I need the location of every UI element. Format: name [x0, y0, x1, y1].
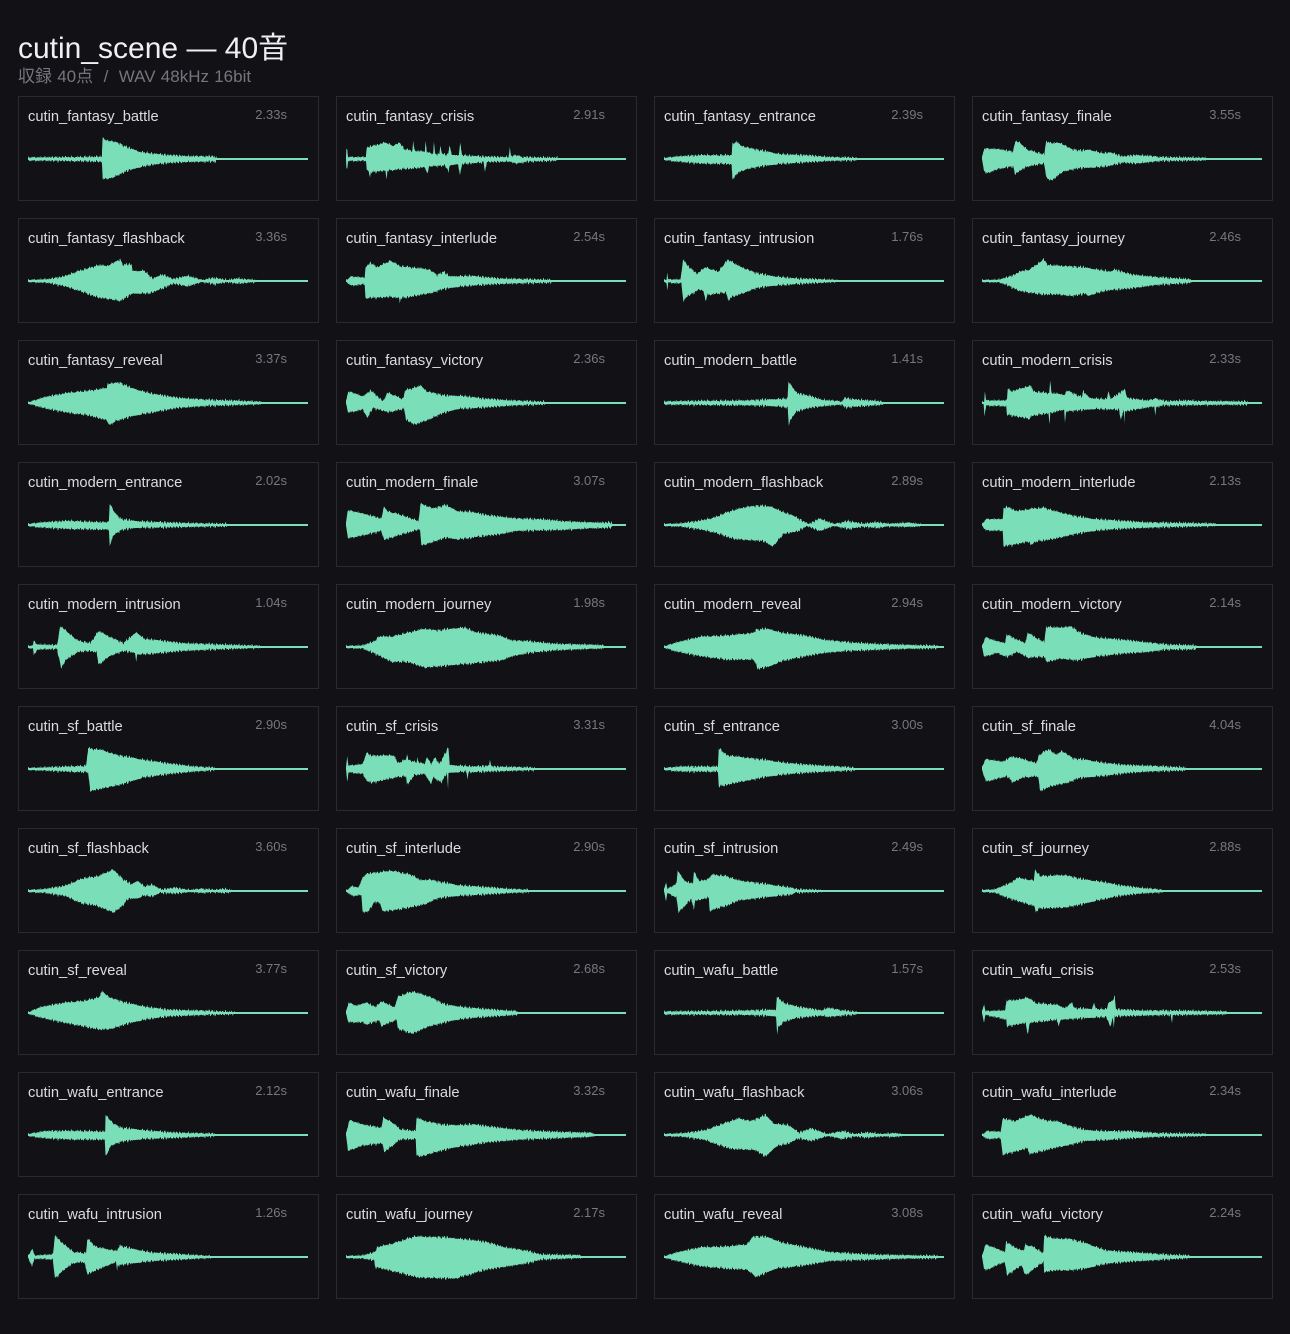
waveform	[28, 859, 308, 923]
panel: cutin_wafu_victory	[972, 1194, 1273, 1299]
waveform	[982, 859, 1262, 923]
panel: cutin_wafu_battle	[654, 950, 955, 1055]
panel: cutin_fantasy_interlude	[336, 218, 637, 323]
panel: cutin_modern_journey	[336, 584, 637, 689]
name: cutin_fantasy_reveal	[28, 353, 163, 369]
waveform	[346, 859, 626, 923]
name: cutin_fantasy_finale	[982, 109, 1112, 125]
panel: cutin_wafu_intrusion	[18, 1194, 319, 1299]
waveform	[28, 737, 308, 801]
duration: 2.91s	[573, 107, 605, 122]
duration: 1.57s	[891, 961, 923, 976]
panel: cutin_modern_interlude	[972, 462, 1273, 567]
waveform	[28, 127, 308, 191]
name: cutin_fantasy_journey	[982, 231, 1125, 247]
waveform	[664, 859, 944, 923]
waveform	[346, 981, 626, 1045]
duration: 2.46s	[1209, 229, 1241, 244]
panel: cutin_fantasy_victory	[336, 340, 637, 445]
waveform	[664, 371, 944, 435]
panel: cutin_sf_reveal	[18, 950, 319, 1055]
name: cutin_modern_battle	[664, 353, 797, 369]
waveform	[982, 371, 1262, 435]
waveform	[346, 249, 626, 313]
name: cutin_wafu_entrance	[28, 1085, 164, 1101]
waveform	[982, 1103, 1262, 1167]
duration: 2.14s	[1209, 595, 1241, 610]
name: cutin_wafu_reveal	[664, 1207, 782, 1223]
name: cutin_modern_finale	[346, 475, 478, 491]
name: cutin_sf_reveal	[28, 963, 127, 979]
waveform	[664, 615, 944, 679]
panel: cutin_sf_victory	[336, 950, 637, 1055]
waveform	[346, 615, 626, 679]
name: cutin_wafu_journey	[346, 1207, 473, 1223]
name: cutin_modern_reveal	[664, 597, 801, 613]
panel: cutin_modern_finale	[336, 462, 637, 567]
duration: 3.60s	[255, 839, 287, 854]
panel: cutin_sf_crisis	[336, 706, 637, 811]
name: cutin_wafu_crisis	[982, 963, 1094, 979]
panel: cutin_sf_finale	[972, 706, 1273, 811]
panel: cutin_wafu_crisis	[972, 950, 1273, 1055]
name: cutin_sf_battle	[28, 719, 123, 735]
duration: 3.31s	[573, 717, 605, 732]
waveform	[982, 249, 1262, 313]
duration: 2.24s	[1209, 1205, 1241, 1220]
panel: cutin_modern_battle	[654, 340, 955, 445]
waveform	[28, 981, 308, 1045]
duration: 1.76s	[891, 229, 923, 244]
duration: 2.33s	[1209, 351, 1241, 366]
name: cutin_sf_finale	[982, 719, 1076, 735]
panel: cutin_fantasy_crisis	[336, 96, 637, 201]
panel: cutin_wafu_reveal	[654, 1194, 955, 1299]
waveform	[982, 1225, 1262, 1289]
waveform	[664, 1103, 944, 1167]
panel: cutin_fantasy_entrance	[654, 96, 955, 201]
panel: cutin_fantasy_reveal	[18, 340, 319, 445]
waveform	[346, 493, 626, 557]
name: cutin_sf_flashback	[28, 841, 149, 857]
waveform	[982, 493, 1262, 557]
duration: 3.77s	[255, 961, 287, 976]
name: cutin_modern_entrance	[28, 475, 182, 491]
duration: 2.94s	[891, 595, 923, 610]
duration: 3.37s	[255, 351, 287, 366]
panel: cutin_wafu_finale	[336, 1072, 637, 1177]
name: cutin_fantasy_crisis	[346, 109, 474, 125]
waveform	[28, 1225, 308, 1289]
waveform	[28, 493, 308, 557]
name: cutin_wafu_intrusion	[28, 1207, 162, 1223]
waveform	[28, 615, 308, 679]
name: cutin_fantasy_intrusion	[664, 231, 814, 247]
duration: 1.41s	[891, 351, 923, 366]
duration: 3.00s	[891, 717, 923, 732]
name: cutin_wafu_victory	[982, 1207, 1103, 1223]
name: cutin_sf_intrusion	[664, 841, 778, 857]
duration: 2.36s	[573, 351, 605, 366]
duration: 2.53s	[1209, 961, 1241, 976]
waveform	[346, 1103, 626, 1167]
name: cutin_sf_interlude	[346, 841, 461, 857]
waveform	[982, 127, 1262, 191]
name: cutin_fantasy_entrance	[664, 109, 816, 125]
duration: 2.13s	[1209, 473, 1241, 488]
panel: cutin_modern_entrance	[18, 462, 319, 567]
name: cutin_wafu_interlude	[982, 1085, 1117, 1101]
panel: cutin_modern_reveal	[654, 584, 955, 689]
name: cutin_sf_crisis	[346, 719, 438, 735]
duration: 2.88s	[1209, 839, 1241, 854]
subtitle: 収録 40点 / WAV 48kHz 16bit	[18, 67, 251, 86]
duration: 3.32s	[573, 1083, 605, 1098]
duration: 2.54s	[573, 229, 605, 244]
panel: cutin_modern_victory	[972, 584, 1273, 689]
panel: cutin_sf_entrance	[654, 706, 955, 811]
waveform	[28, 249, 308, 313]
panel: cutin_sf_battle	[18, 706, 319, 811]
name: cutin_modern_intrusion	[28, 597, 181, 613]
duration: 2.12s	[255, 1083, 287, 1098]
name: cutin_sf_journey	[982, 841, 1089, 857]
panel: cutin_sf_flashback	[18, 828, 319, 933]
waveform	[982, 981, 1262, 1045]
panel: cutin_wafu_journey	[336, 1194, 637, 1299]
duration: 1.04s	[255, 595, 287, 610]
panel: cutin_modern_crisis	[972, 340, 1273, 445]
duration: 2.17s	[573, 1205, 605, 1220]
waveform	[28, 1103, 308, 1167]
name: cutin_wafu_finale	[346, 1085, 460, 1101]
duration: 3.55s	[1209, 107, 1241, 122]
waveform	[664, 981, 944, 1045]
duration: 4.04s	[1209, 717, 1241, 732]
waveform	[664, 127, 944, 191]
panel: cutin_fantasy_flashback	[18, 218, 319, 323]
panel: cutin_modern_intrusion	[18, 584, 319, 689]
waveform	[346, 737, 626, 801]
name: cutin_sf_entrance	[664, 719, 780, 735]
duration: 2.90s	[573, 839, 605, 854]
panel: cutin_sf_interlude	[336, 828, 637, 933]
name: cutin_fantasy_battle	[28, 109, 159, 125]
duration: 1.26s	[255, 1205, 287, 1220]
panel: cutin_fantasy_finale	[972, 96, 1273, 201]
name: cutin_modern_flashback	[664, 475, 823, 491]
waveform	[346, 371, 626, 435]
duration: 3.07s	[573, 473, 605, 488]
name: cutin_wafu_flashback	[664, 1085, 804, 1101]
panel: cutin_fantasy_intrusion	[654, 218, 955, 323]
name: cutin_modern_victory	[982, 597, 1122, 613]
name: cutin_fantasy_interlude	[346, 231, 497, 247]
panel: cutin_wafu_interlude	[972, 1072, 1273, 1177]
duration: 2.34s	[1209, 1083, 1241, 1098]
waveform	[28, 371, 308, 435]
duration: 2.33s	[255, 107, 287, 122]
panel: cutin_wafu_entrance	[18, 1072, 319, 1177]
waveform	[346, 1225, 626, 1289]
name: cutin_sf_victory	[346, 963, 447, 979]
waveform	[982, 615, 1262, 679]
name: cutin_fantasy_flashback	[28, 231, 185, 247]
duration: 2.68s	[573, 961, 605, 976]
name: cutin_fantasy_victory	[346, 353, 483, 369]
duration: 2.39s	[891, 107, 923, 122]
duration: 1.98s	[573, 595, 605, 610]
duration: 3.06s	[891, 1083, 923, 1098]
duration: 3.08s	[891, 1205, 923, 1220]
name: cutin_modern_crisis	[982, 353, 1113, 369]
name: cutin_modern_journey	[346, 597, 491, 613]
duration: 2.89s	[891, 473, 923, 488]
waveform	[982, 737, 1262, 801]
panel: cutin_fantasy_journey	[972, 218, 1273, 323]
duration: 3.36s	[255, 229, 287, 244]
panel: cutin_wafu_flashback	[654, 1072, 955, 1177]
panel: cutin_sf_journey	[972, 828, 1273, 933]
panel: cutin_fantasy_battle	[18, 96, 319, 201]
name: cutin_wafu_battle	[664, 963, 778, 979]
duration: 2.49s	[891, 839, 923, 854]
waveform	[664, 737, 944, 801]
waveform	[664, 493, 944, 557]
duration: 2.90s	[255, 717, 287, 732]
waveform	[346, 127, 626, 191]
waveform	[664, 249, 944, 313]
panel: cutin_modern_flashback	[654, 462, 955, 567]
waveform	[664, 1225, 944, 1289]
duration: 2.02s	[255, 473, 287, 488]
panel: cutin_sf_intrusion	[654, 828, 955, 933]
title: cutin_scene — 40音	[18, 32, 288, 65]
name: cutin_modern_interlude	[982, 475, 1136, 491]
